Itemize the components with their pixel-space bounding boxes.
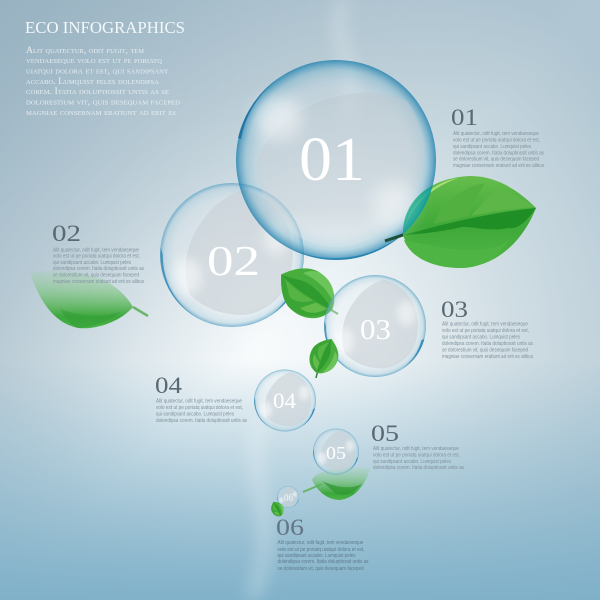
- text block 03: dolendipsa corem. Itatia doluptiossit untis as: [442, 341, 533, 347]
- faded leaf beside bubble 05: [303, 468, 370, 500]
- text block 03: qui sandipsant accabo. Lumquist peles: [442, 334, 520, 340]
- bubble 03: [322, 271, 438, 386]
- text block 05: volo est ut pe poriatq uiatqui dolora et est,: [373, 452, 460, 458]
- text block 01: qui sandipsant accabo. Lumquist peles: [453, 144, 531, 150]
- bubble 02: 02: [207, 239, 260, 285]
- intro text block: magniae consernam eratiunt ad erit es: [26, 107, 176, 117]
- bubble 03: 03: [360, 314, 391, 346]
- text block 06: [276, 515, 369, 572]
- text block 02: magniae consernam eratiunt ad erit es alibus: [53, 279, 144, 285]
- text block 04: 04: [155, 373, 183, 398]
- tiny leaf by bubble 06: [268, 499, 286, 519]
- text block 06: 06: [276, 515, 304, 540]
- smoke wisps: [252, 0, 351, 600]
- leaf between bubbles 02 and 03: [268, 255, 346, 329]
- bubble 02: [157, 177, 321, 340]
- text block 03: 03: [441, 297, 468, 322]
- text block 02: dolendipsa corem. Itatia doluptiossit untis as: [53, 266, 144, 272]
- text block 06: qui sandipsant accabo. Lumquist peles: [278, 553, 356, 559]
- faded leaf under heading 02: [30, 271, 148, 328]
- text block 06: Alit quatectur, odit fugit, tem vendaeseque: [278, 540, 364, 546]
- text block 04: [155, 373, 247, 424]
- text block 03: volo est ut pe poriatq uiatqui dolora et est,: [442, 328, 529, 334]
- intro text block: corem. Itatia doluptiossit untis as se: [26, 86, 169, 96]
- text block 05: Alit quatectur, odit fugit, tem vendaeseque: [373, 446, 459, 452]
- text block 01: Alit quatectur, odit fugit, tem vendaeseque: [453, 131, 539, 137]
- text block 06: volo est ut pe poriatq uiatqui dolora et est,: [278, 547, 364, 553]
- text block 02: se dolorestium vit, quis desequam faceped: [53, 272, 139, 278]
- text block 01: magniae consernam eratiunt ad erit es alibus: [453, 163, 544, 169]
- text block 02: Alit quatectur, odit fugit, tem vendaeseque: [53, 248, 139, 254]
- title: ECO INFOGRAPHICS: [25, 18, 185, 37]
- bubble 01: 01: [299, 126, 365, 194]
- text block 03: Alit quatectur, odit fugit, tem vendaeseque: [442, 322, 528, 328]
- bubble 01: [236, 60, 436, 260]
- text block 02: 02: [52, 221, 81, 246]
- bubble 06: 06: [284, 493, 293, 504]
- intro text block: accabo. Lumquist peles dolendipsa: [26, 76, 160, 86]
- text block 03: magniae consernam eratiunt ad erit es alibus: [442, 354, 533, 360]
- text block 01: volo est ut pe poriatq uiatqui dolora et est,: [453, 138, 540, 144]
- text block 01: 01: [451, 105, 478, 130]
- intro text block: Alit quatectur, odit fugit, tem: [26, 45, 145, 55]
- text block 05: dolendipsa corem. Itatia doluptiossit untis as: [373, 465, 464, 471]
- small leaf between bubbles 03 and 04: [304, 334, 344, 379]
- text block 06: se dolorestium vit, quis desequam faceped: [278, 566, 364, 572]
- text block 03: se dolorestium vit, quis desequam faceped: [442, 348, 528, 354]
- text block 02: volo est ut pe poriatq uiatqui dolora et est,: [53, 254, 140, 260]
- intro text block: [26, 45, 181, 117]
- text block 02: qui sandipsant accabo. Lumquist peles: [53, 260, 131, 266]
- intro text block: vendaeseque volo est ut pe poriatq: [26, 55, 163, 65]
- text block 04: Alit quatectur, odit fugit, tem vendaeseque: [156, 399, 242, 405]
- bubble 06: [277, 485, 302, 510]
- text block 05: qui sandipsant accabo. Lumquist peles: [373, 459, 451, 465]
- text block 06: dolendipsa corem. Itatia doluptiossit untis as: [278, 559, 369, 565]
- intro text block: uiatqui dolora et est, qui sandipsant: [26, 66, 168, 76]
- intro text block: dolorestium vit, quis desequam faceped: [26, 96, 181, 106]
- text block 04: qui sandipsant accabo. Lumquist peles: [156, 412, 234, 418]
- bubble 05: [312, 427, 364, 479]
- text block 01: dolendipsa corem. Itatia doluptiossit untis as: [453, 150, 544, 156]
- large leaf beside bubble 01: [385, 176, 536, 268]
- text block 05: 05: [371, 421, 399, 446]
- bubble 04: [253, 367, 323, 437]
- text block 01: [451, 105, 544, 169]
- text block 03: [441, 297, 533, 360]
- text block 05: [371, 421, 464, 471]
- text block 02: [52, 221, 144, 285]
- text block 04: dolendipsa corem. Itatia doluptiossit untis as: [156, 418, 247, 424]
- text block 01: se dolorestium vit, quis desequam faceped: [453, 156, 539, 162]
- text block 04: volo est ut pe poriatq uiatqui dolora et est,: [156, 405, 243, 411]
- bubble 05: 05: [326, 443, 346, 463]
- bubble 04: 04: [273, 388, 296, 413]
